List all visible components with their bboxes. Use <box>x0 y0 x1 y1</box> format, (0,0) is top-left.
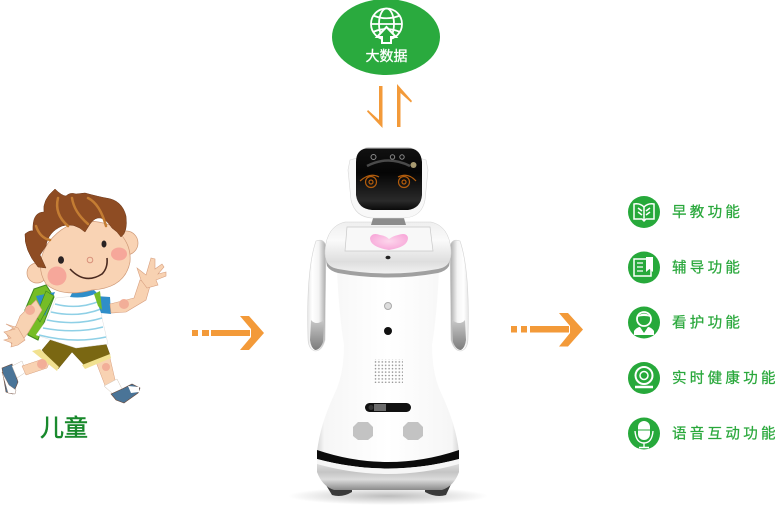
icon: microphone <box>635 421 653 448</box>
chest sensor <box>386 256 390 259</box>
big data badge <box>332 0 440 75</box>
wheels <box>323 480 453 496</box>
head <box>40 221 130 293</box>
arrow: data up <box>397 84 412 127</box>
right speaker <box>403 422 423 440</box>
ears <box>114 231 138 255</box>
head shell <box>348 158 428 218</box>
function: voice interaction: 语音互动功能 <box>672 426 777 442</box>
icon: open book <box>634 204 654 221</box>
left arm <box>308 240 326 351</box>
tablet screen <box>345 227 433 251</box>
shirt <box>36 293 108 348</box>
left eye <box>360 175 379 188</box>
function: care <box>628 306 743 338</box>
black belt <box>317 450 459 468</box>
slot sensor <box>365 403 411 412</box>
shorts <box>42 338 110 369</box>
chest band <box>326 260 450 278</box>
base <box>317 460 459 490</box>
speaker grille <box>374 359 403 383</box>
left arm lower gray <box>310 320 324 350</box>
backpack strap <box>36 291 54 322</box>
body sensor <box>384 302 392 310</box>
back foot <box>2 364 18 394</box>
chest shoulders <box>325 222 451 275</box>
icon: globe with upload arrow <box>371 8 402 43</box>
label: big data: 大数据 <box>366 48 408 64</box>
icon: webcam <box>635 367 653 387</box>
head cameras <box>367 154 410 166</box>
eyes, nose, mouth <box>58 256 64 264</box>
body camera <box>384 327 392 335</box>
sleeves <box>36 292 55 316</box>
robot <box>288 147 488 505</box>
cheeks <box>48 266 66 286</box>
arrow: robot to functions <box>511 313 583 346</box>
illustration: boy <box>2 189 166 403</box>
right arm <box>450 240 468 351</box>
front shoe <box>111 384 140 403</box>
function: real-time health <box>628 362 777 394</box>
function: early education: 早教功能 <box>672 204 743 221</box>
heart <box>370 234 408 250</box>
right arm lower gray <box>452 320 466 350</box>
function: early education <box>628 196 743 228</box>
body <box>317 270 459 463</box>
arrow: data down <box>367 86 382 128</box>
label: child: 儿童 <box>40 415 88 442</box>
function: tutoring <box>628 252 743 284</box>
arm right and hand <box>110 280 150 313</box>
arrow: child to robot <box>192 316 264 350</box>
face screen <box>356 148 422 210</box>
left speaker <box>353 422 373 440</box>
neck <box>371 215 406 225</box>
function: tutoring: 辅导功能 <box>672 260 743 276</box>
backpack <box>25 285 54 340</box>
function: real-time health: 实时健康功能 <box>672 370 777 387</box>
function: care: 看护功能 <box>672 314 743 332</box>
hair <box>25 189 126 268</box>
icon: book with bookmark <box>634 257 653 276</box>
right eye <box>398 175 416 188</box>
arm left and hand <box>6 300 42 345</box>
function: voice interaction <box>628 418 777 450</box>
front leg <box>96 358 116 388</box>
floor shadow <box>288 487 488 505</box>
icon: child bust <box>634 312 654 335</box>
